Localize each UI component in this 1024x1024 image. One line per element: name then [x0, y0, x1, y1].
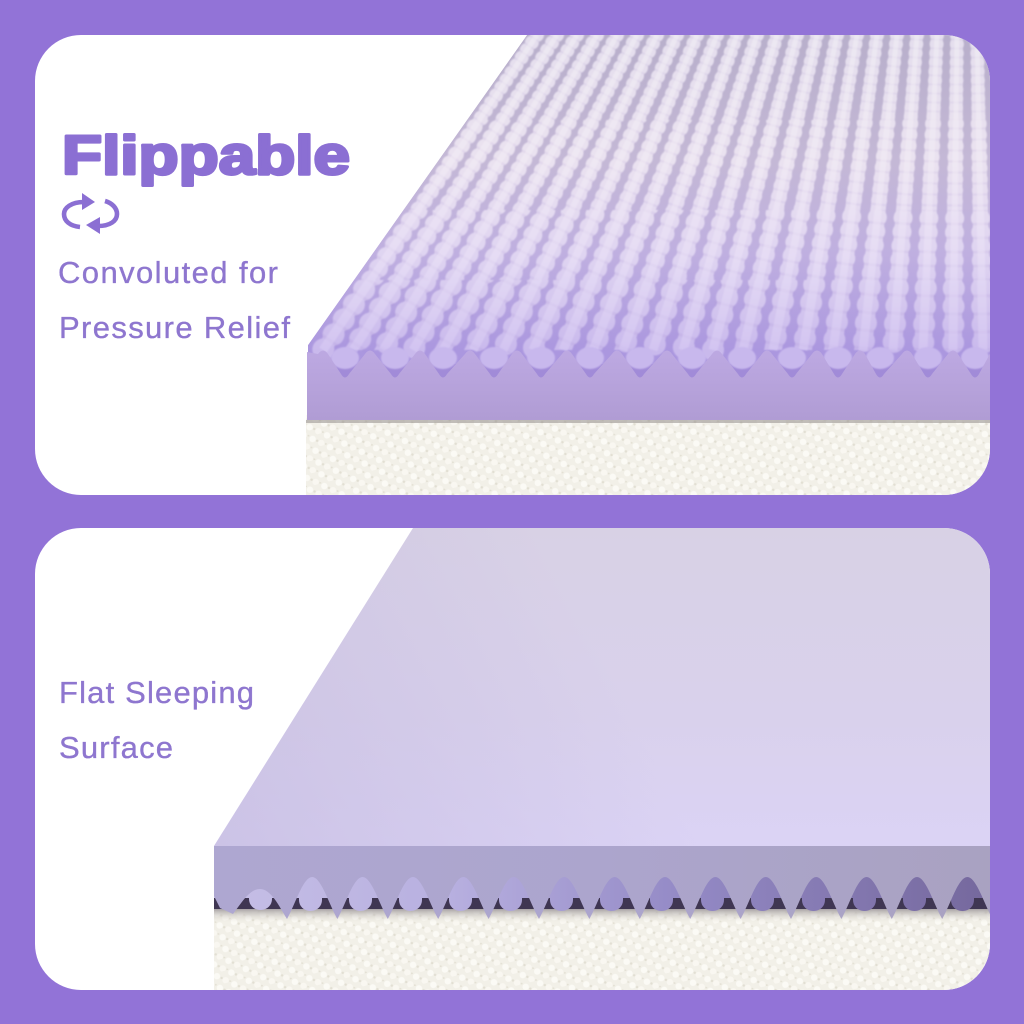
photo: convoluted foam on mattress: [306, 35, 996, 500]
inner bumps: [249, 898, 974, 911]
foam front face with teeth: [214, 846, 993, 919]
text: flat sleeping surface: Surface: [59, 730, 173, 765]
flat top surface: [214, 528, 992, 846]
transverse bump shading: [323, 35, 983, 350]
text: flat sleeping surface: [59, 675, 254, 765]
mattress base: [214, 912, 990, 990]
photo: flat foam on mattress: [214, 528, 994, 994]
panel: convoluted side: [35, 35, 996, 500]
recess behind teeth: [214, 877, 983, 898]
text: convoluted for pressure relief: Convoluted for: [58, 255, 278, 290]
panel background: [35, 528, 990, 990]
dark gap: [214, 898, 992, 909]
front row bumps: [331, 347, 989, 369]
title: Flippable: [62, 124, 350, 186]
icon: flip arrows: [64, 193, 117, 234]
panel: flat side: [35, 528, 994, 994]
shadow under foam: [214, 909, 990, 920]
panel background: [35, 35, 990, 495]
scalloped bumps: [323, 35, 983, 350]
mattress base: [306, 415, 996, 500]
text: convoluted for pressure relief: Pressure Relief: [59, 310, 290, 345]
text: flat sleeping surface: Flat Sleeping: [59, 675, 254, 710]
foam front face with zigzag: [307, 350, 992, 420]
ridge crest highlight: [323, 35, 983, 350]
deep valley shade behind the front row: [337, 364, 982, 378]
foam top surface with ridges: [308, 35, 992, 386]
ridge bodies: [314, 35, 992, 350]
seam shadow: [306, 420, 992, 423]
text: convoluted for pressure relief: [58, 255, 290, 345]
